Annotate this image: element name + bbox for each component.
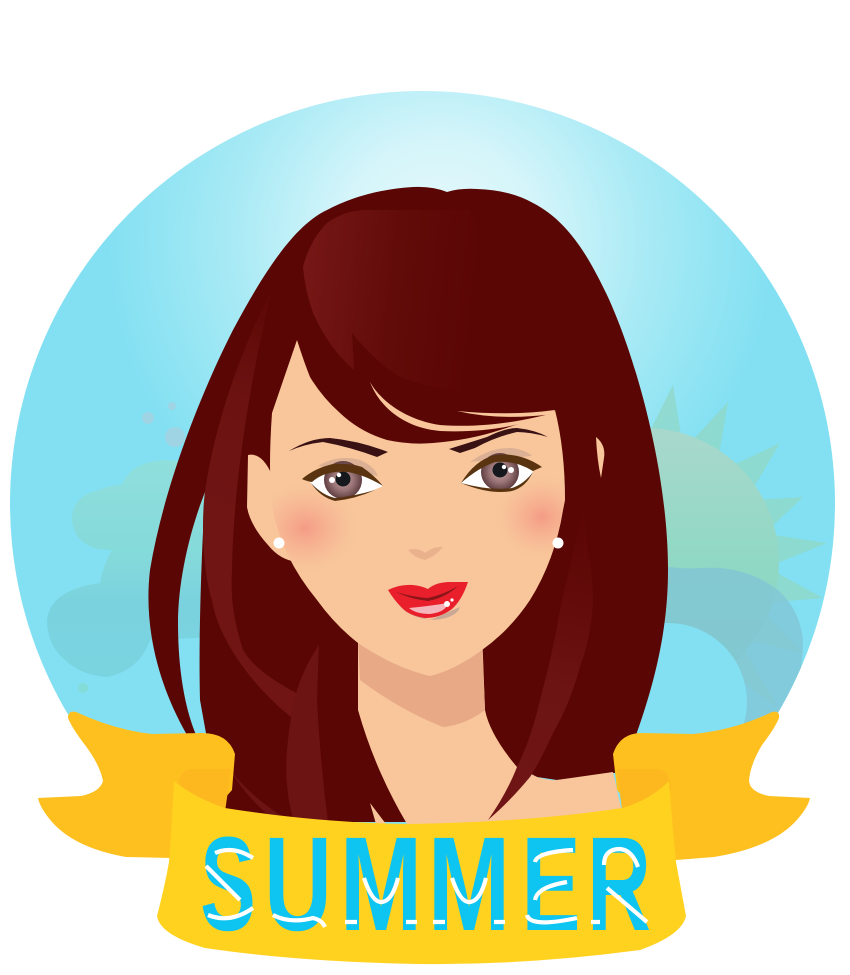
neck and shoulder bbox=[358, 630, 622, 824]
right eye bbox=[461, 448, 542, 492]
blush bbox=[274, 489, 565, 558]
skin sliver bbox=[370, 803, 386, 824]
title: SUMMER: U bbox=[264, 808, 332, 959]
neck shadow bbox=[358, 640, 485, 727]
light cloud gap bbox=[640, 623, 747, 734]
fringe over forehead bbox=[297, 250, 580, 444]
left eye bbox=[302, 458, 383, 501]
title: SUMMER: S bbox=[200, 809, 256, 959]
right eyebrow bbox=[449, 428, 548, 453]
background scene: sun and clouds bbox=[47, 385, 826, 724]
hair: cap highlight bbox=[303, 210, 506, 395]
title: SUMMER: M bbox=[340, 808, 422, 958]
left cloud bbox=[47, 460, 215, 677]
hair: lower streak bbox=[230, 770, 280, 815]
hair: front lock bbox=[286, 645, 328, 822]
right ear sliver bbox=[596, 437, 604, 478]
title: SUMMER: E bbox=[522, 810, 580, 960]
ribbon right wing bbox=[613, 712, 810, 860]
title: SUMMER: R bbox=[587, 810, 651, 960]
hair: back mass bbox=[148, 187, 668, 822]
left eyebrow bbox=[289, 438, 388, 457]
hair: left highlight band bbox=[203, 290, 310, 720]
letter stripes bbox=[206, 849, 647, 927]
title: SUMMER bbox=[200, 808, 651, 960]
title: SUMMER: M bbox=[428, 808, 510, 958]
left ear bbox=[247, 455, 297, 562]
fringe skin streaks bbox=[370, 382, 555, 431]
ribbon left wing bbox=[38, 712, 235, 858]
cloud over sun bbox=[664, 566, 803, 724]
lips bbox=[388, 582, 468, 620]
ribbon fold shadows bbox=[178, 769, 671, 812]
earrings bbox=[274, 538, 564, 548]
ribbon front band bbox=[157, 781, 686, 964]
nose bbox=[408, 547, 443, 560]
sun bbox=[650, 385, 826, 661]
bubbles bbox=[78, 402, 185, 693]
face bbox=[270, 300, 565, 676]
hair: right strand highlight bbox=[488, 500, 593, 820]
